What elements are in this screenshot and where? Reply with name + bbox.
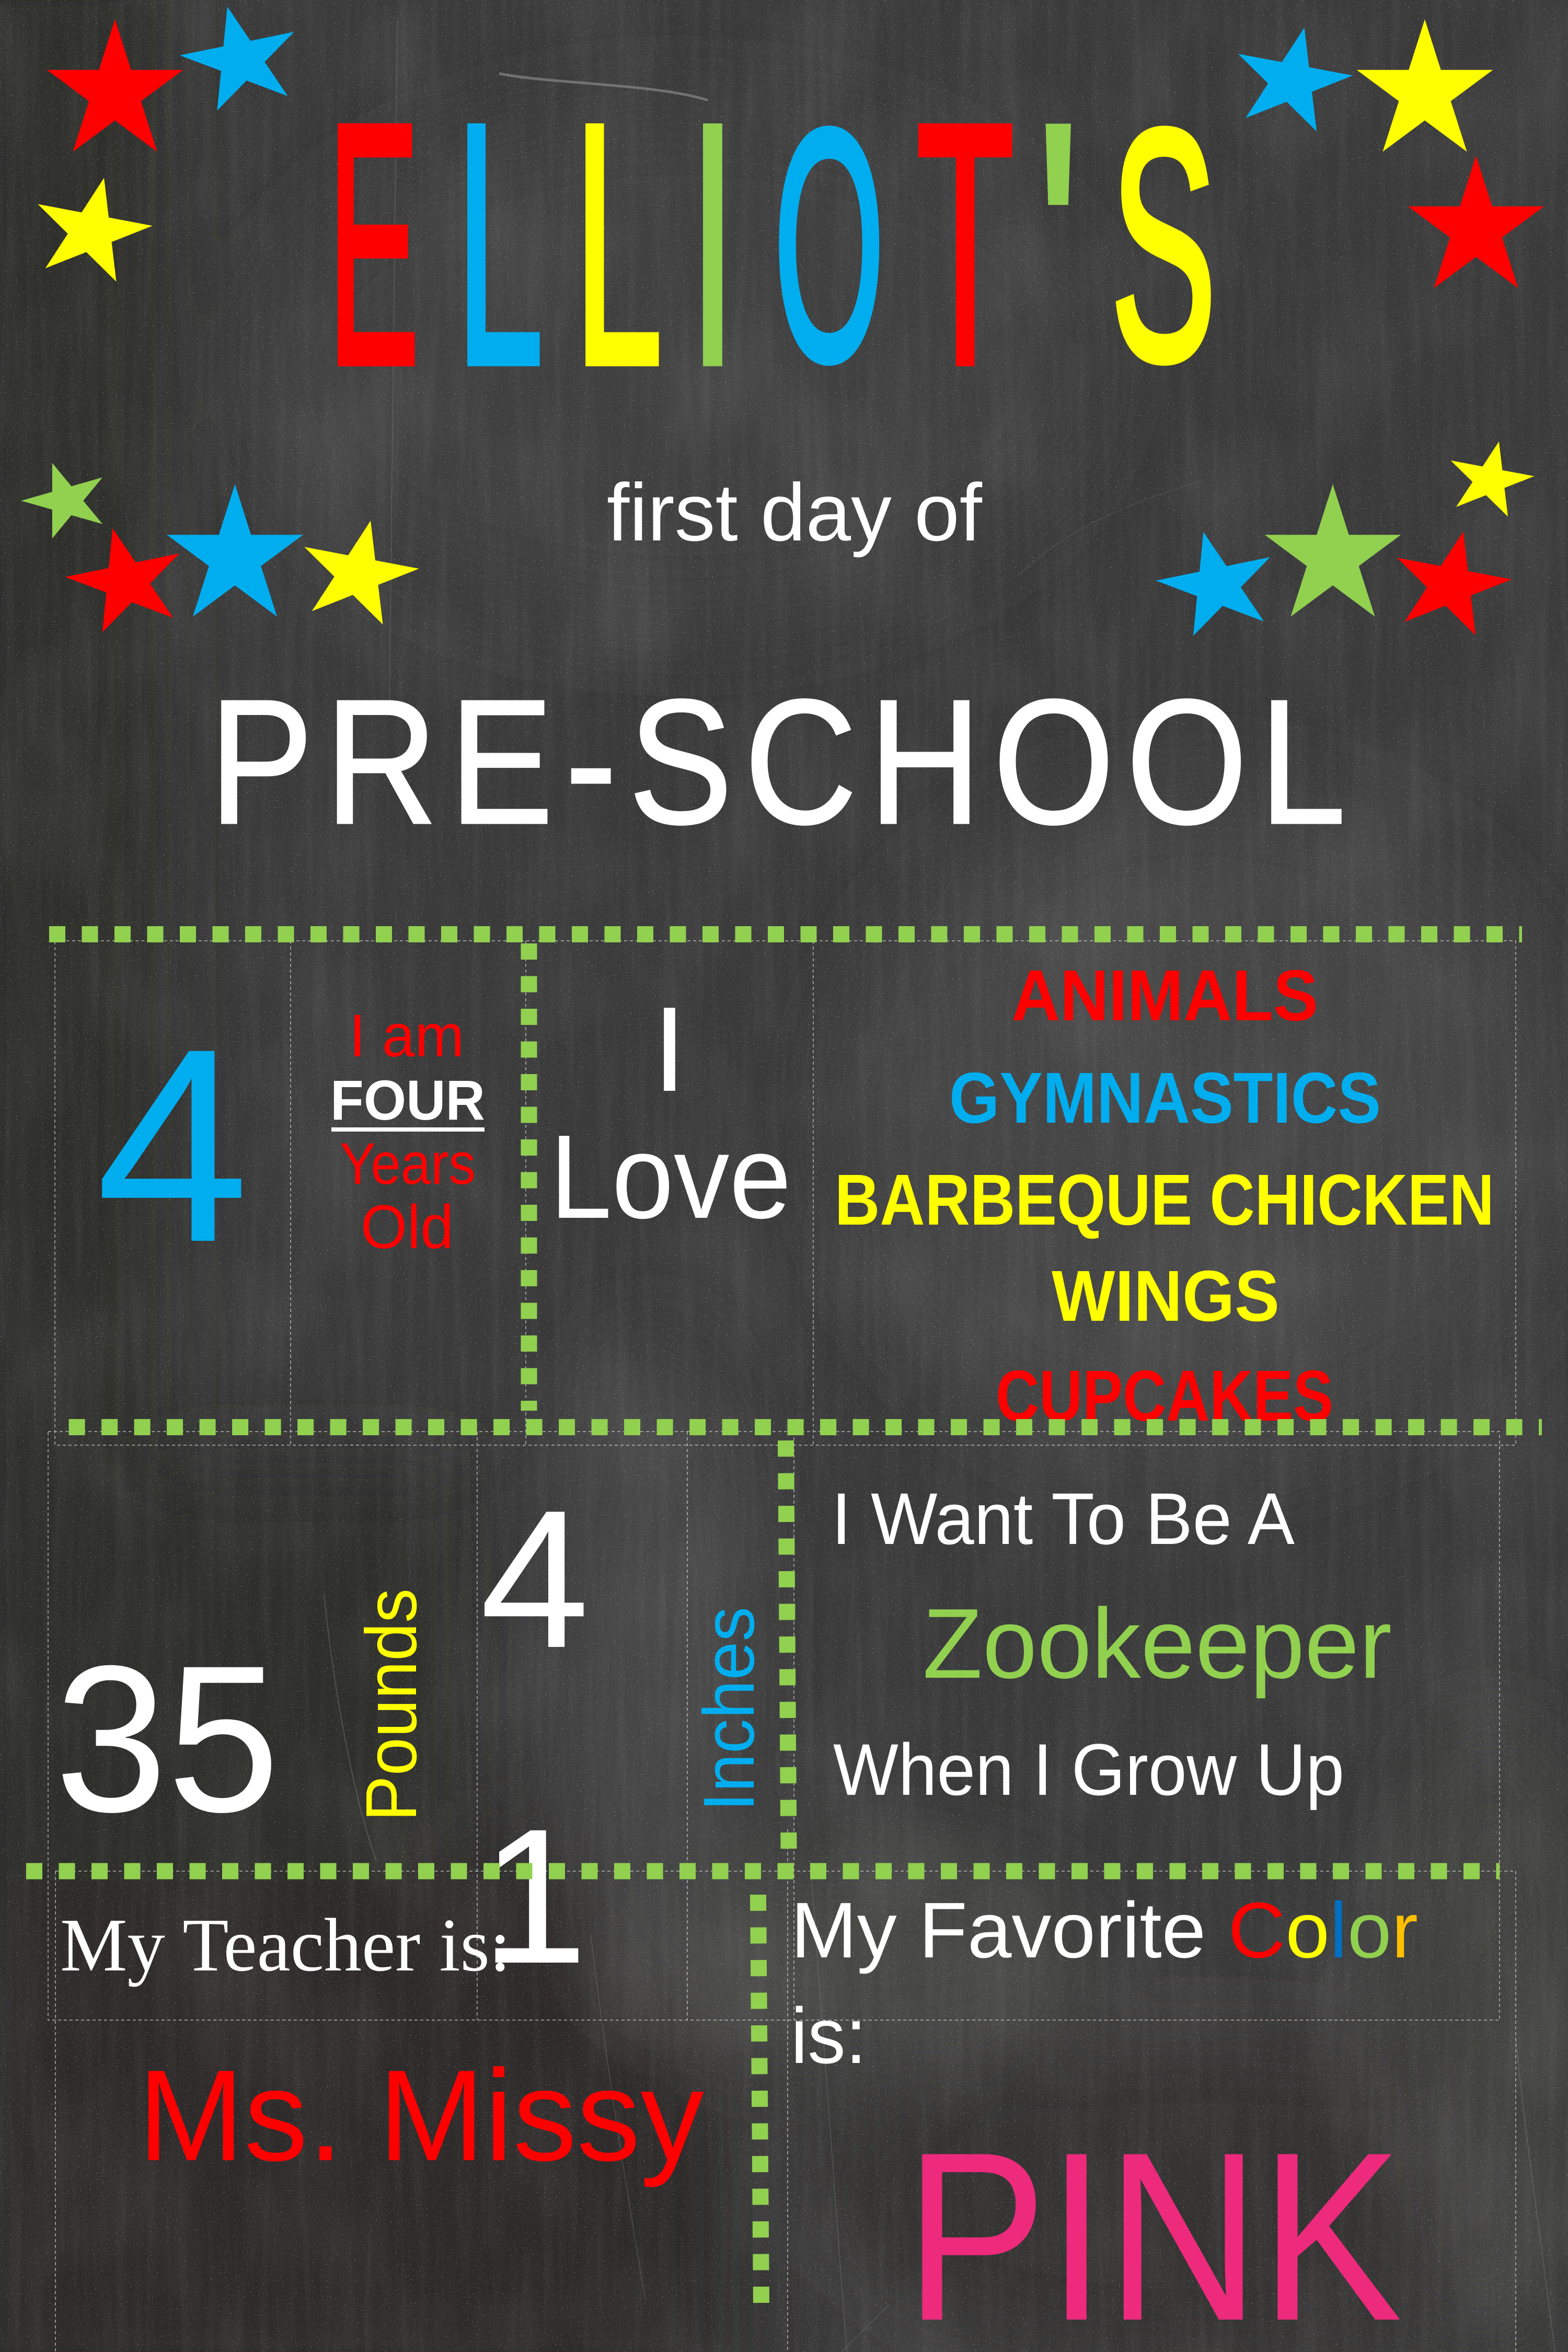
panel: career: When I Grow Up	[833, 1728, 1344, 1811]
stars: middle left	[11, 451, 428, 637]
stars: top left	[24, 0, 309, 286]
dotted divider: second horizontal	[69, 1419, 1542, 1435]
teacher name: Ms. Missy	[138, 2043, 704, 2188]
title: ELLIOT'S: S	[1111, 63, 1216, 429]
loves list: CUPCAKES	[996, 1356, 1333, 1436]
panel: career: Zookeeper	[923, 1588, 1392, 1699]
weight unit: Pounds	[351, 1588, 432, 1821]
panel: I love	[550, 955, 1494, 1436]
panel: teacher	[60, 1904, 704, 2188]
title: ELLIOT'S: E	[328, 54, 419, 435]
dotted divider: third horizontal	[26, 1863, 1500, 1880]
loves list: WINGS	[1052, 1256, 1279, 1336]
title: ELLIOT'S: T	[917, 53, 1014, 434]
loves list	[835, 955, 1494, 1436]
panel: favorite color	[791, 1886, 1418, 2352]
layout guide lines	[48, 941, 1516, 2352]
panel: career: I Want To Be A	[832, 1478, 1295, 1560]
age caption: I am	[349, 1002, 464, 1069]
title: ELLIOT'S: L	[456, 53, 543, 435]
age caption: Years	[340, 1131, 476, 1196]
I Love heading: I	[653, 982, 686, 1116]
stars: top right	[1224, 17, 1544, 288]
panel: measurements	[55, 1469, 769, 2003]
panel: career	[832, 1478, 1392, 1811]
subtitle: first day of: first day of	[607, 467, 983, 558]
title: ELLIOT'S	[328, 53, 1216, 435]
I Love heading: Love	[550, 1111, 791, 1243]
color label: My Favorite Color	[791, 1886, 1418, 1974]
big number 4: 4	[96, 991, 249, 1299]
teacher label: My Teacher is:	[60, 1904, 511, 1987]
title: ELLIOT'S: I	[690, 53, 735, 435]
dotted divider: third vertical	[758, 1895, 761, 2303]
age caption	[330, 1002, 485, 1262]
heading: PRE-SCHOOL: PRE-SCHOOL	[209, 662, 1346, 861]
weight value 35: 35	[55, 1622, 280, 1855]
dotted divider: top horizontal	[49, 926, 1522, 942]
stars: middle right	[1146, 434, 1541, 640]
title: ELLIOT'S: O	[774, 63, 884, 429]
title: ELLIOT'S: L	[574, 53, 662, 435]
height inches 1: 1	[481, 1789, 587, 2003]
loves list: GYMNASTICS	[949, 1058, 1381, 1138]
label continuation: is:	[791, 1991, 867, 2080]
dotted divider: first vertical	[521, 943, 537, 1411]
height unit: Inches	[689, 1607, 769, 1812]
loves list: ANIMALS	[1011, 955, 1318, 1036]
dotted divider: second vertical	[786, 1440, 789, 1849]
panel: age	[96, 991, 485, 1299]
age caption: FOUR	[330, 1068, 485, 1132]
height feet 4: 4	[480, 1469, 590, 1689]
I Love heading	[550, 982, 791, 1243]
age caption: Old	[361, 1193, 454, 1262]
title: ELLIOT'S: '	[1037, 54, 1080, 435]
